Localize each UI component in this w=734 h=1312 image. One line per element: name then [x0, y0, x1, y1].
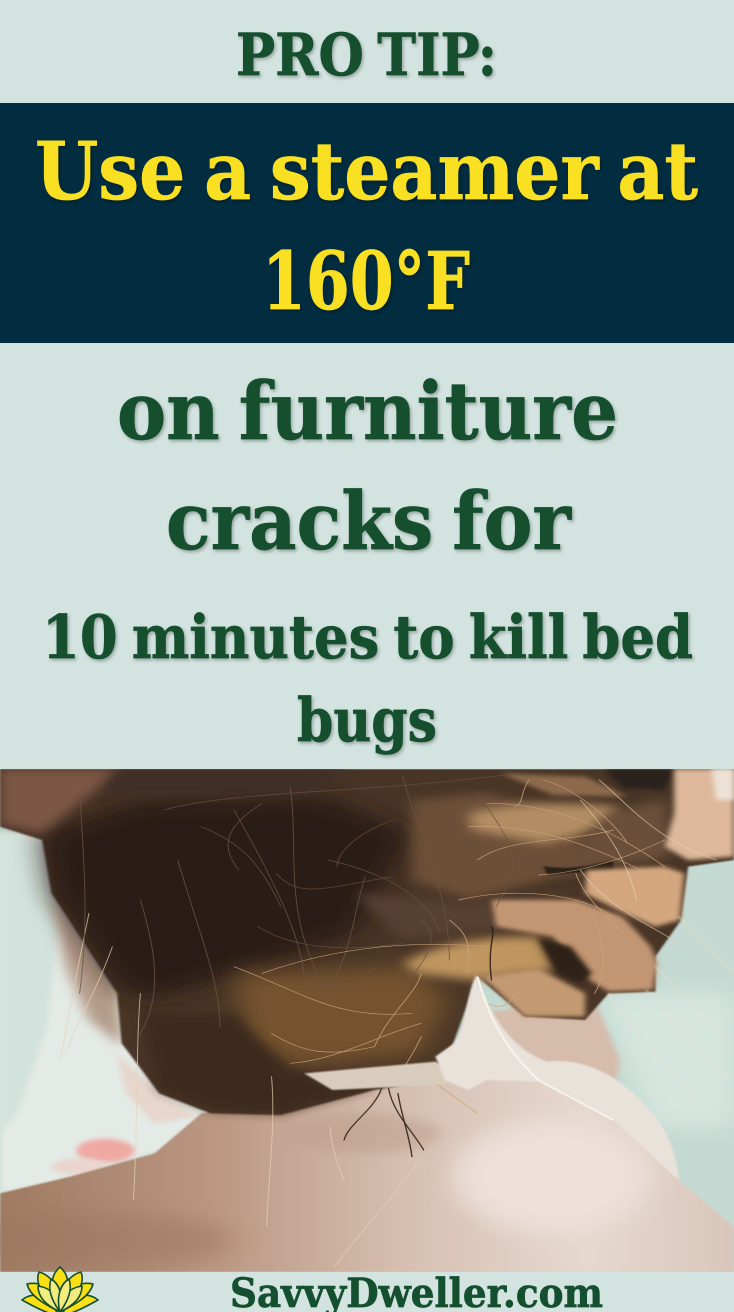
text block: on furniture cracks: cracks for — [166, 474, 572, 568]
lower brown — [234, 967, 449, 1067]
icon: yellow lotus logo — [22, 1267, 98, 1312]
dark braid hole — [538, 938, 592, 983]
white halter strap — [304, 975, 679, 1180]
second section — [492, 900, 658, 992]
text block: on furniture cracks — [117, 364, 618, 568]
heading: pro tip: PRO TIP: — [236, 21, 497, 89]
flyaway hair strands — [61, 773, 734, 1267]
white garment at left — [0, 833, 243, 1193]
left brown tip — [0, 769, 122, 833]
banner line two: 160°F — [262, 234, 470, 328]
top right peach — [665, 769, 734, 860]
gold band — [403, 936, 555, 980]
neck shadow at left — [51, 893, 123, 1047]
middle brown section — [412, 793, 580, 900]
banner: steamer temperature — [0, 103, 734, 343]
hair mass — [0, 769, 734, 1115]
pink patch — [76, 1139, 134, 1163]
text block: duration: bugs — [297, 686, 437, 756]
hair light tones — [0, 769, 734, 1113]
text block: on furniture cracks: on furniture — [117, 364, 618, 458]
shoulder skin — [0, 1067, 734, 1272]
text block: duration — [42, 603, 693, 756]
photo: back of woman's neck and hair — [0, 769, 734, 1272]
dark crown — [42, 797, 412, 1000]
lower gold — [482, 968, 585, 1017]
photo backdrop — [0, 769, 734, 1272]
upper light braid — [468, 804, 618, 843]
dark braid shadow — [552, 800, 669, 873]
right peach lobe — [585, 867, 684, 927]
neck skin — [473, 1000, 620, 1083]
